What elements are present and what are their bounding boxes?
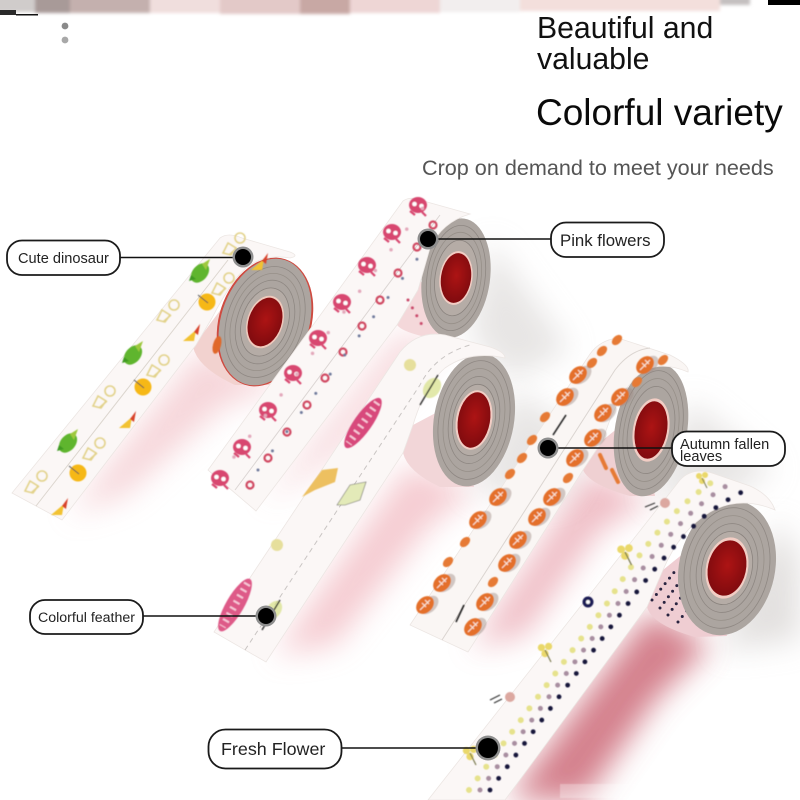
- inner side of the roll: [583, 410, 655, 496]
- leaf motifs: [413, 333, 670, 640]
- tape strip: [12, 235, 295, 520]
- callout: cute dinosaur: [7, 240, 254, 275]
- flower motifs: [211, 197, 445, 489]
- strip centre line: [245, 345, 470, 650]
- roll face: [423, 347, 525, 493]
- roll: cute dinosaur: [12, 233, 329, 520]
- strip centre line: [235, 215, 440, 490]
- callout: fresh flower: [208, 730, 500, 768]
- callout: pink flowers: Pink flowers: [560, 231, 650, 250]
- tape strip: [214, 334, 505, 662]
- roll: autumn fallen leaves: [410, 333, 698, 652]
- callout: colorful feather: [30, 600, 276, 634]
- small grey dots at top left: [62, 23, 68, 43]
- dots on the inner side: [652, 570, 695, 622]
- callout: autumn fallen leaves: [538, 432, 785, 466]
- subheading: Crop on demand to meet your needs: [422, 155, 774, 180]
- roll face: [201, 245, 329, 399]
- dinosaur motifs: [25, 233, 268, 515]
- callout: cute dinosaur: Cute dinosaur: [18, 251, 109, 267]
- callout: pink flowers: [418, 222, 664, 257]
- inner side of the roll: [397, 280, 456, 338]
- strip centre line: [36, 260, 228, 506]
- tape strip: [410, 338, 688, 652]
- roll: colorful feather: [212, 334, 525, 662]
- callout: autumn fallen leaves: leaves: [680, 449, 722, 465]
- tape strip: [428, 471, 775, 800]
- inner side of the roll: [647, 540, 727, 637]
- inner side of the roll: [193, 293, 270, 385]
- cropped photo band at top: [0, 0, 800, 16]
- heading: beautiful and valuable: Beautiful and: [537, 12, 713, 45]
- roll face: [414, 214, 498, 342]
- callout: colorful feather: Colorful feather: [38, 610, 135, 626]
- flower motifs: [463, 472, 708, 765]
- roll face: [666, 492, 788, 644]
- roll: pink flowers: [208, 197, 498, 511]
- roll face: [604, 358, 698, 502]
- soft shadows under the tapes: [70, 240, 800, 800]
- roll: fresh flower: [428, 471, 788, 800]
- callout: fresh flower: Fresh Flower: [221, 739, 325, 759]
- dotted lanes: [469, 480, 742, 790]
- heading: colorful variety: Colorful variety: [536, 92, 783, 133]
- strip centre line: [442, 348, 650, 640]
- callout: autumn fallen leaves: Autumn fallen: [680, 437, 769, 453]
- faint watermark smudge: [560, 784, 635, 798]
- inner side of the roll: [403, 400, 474, 487]
- tape strip: [208, 198, 470, 511]
- feather and leaf motifs: [212, 359, 445, 635]
- heading: beautiful and valuable: valuable: [537, 43, 649, 76]
